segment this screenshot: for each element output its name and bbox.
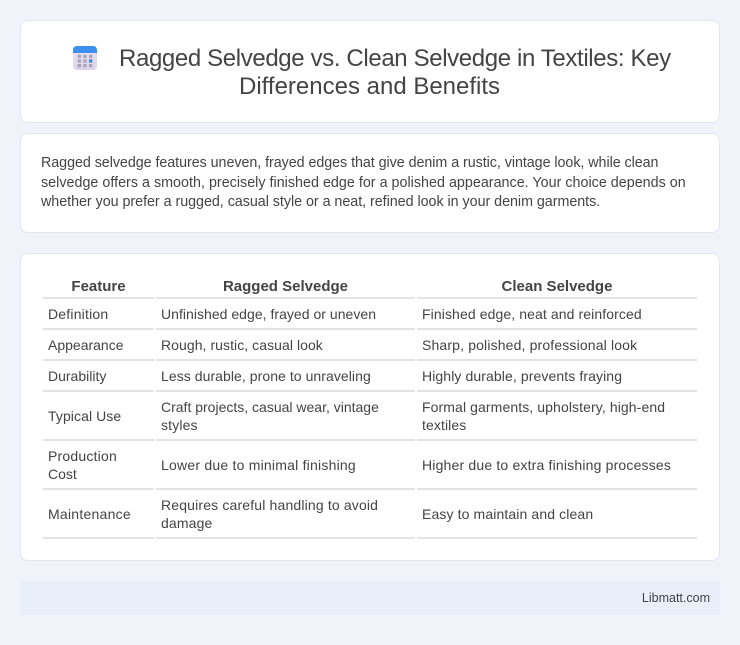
icon: calendar grid	[73, 46, 97, 70]
table header: clean selvedge: Clean Selvedge	[502, 278, 612, 295]
comparison table panel: Finished edge, neat and reinforced	[422, 306, 642, 322]
table header: feature: Feature	[71, 278, 126, 295]
header panel	[20, 20, 720, 123]
comparison table panel: Formal garments, upholstery, high-end	[422, 399, 665, 415]
row: production cost: Production	[48, 448, 117, 464]
comparison table panel: Unfinished edge, frayed or uneven	[161, 306, 376, 322]
comparison table panel: Rough, rustic, casual look	[161, 337, 323, 353]
row: appearance: Appearance	[48, 337, 124, 353]
row: production cost	[48, 448, 117, 482]
comparison table panel: Less durable, prone to unraveling	[161, 368, 371, 384]
title	[119, 45, 671, 100]
comparison table panel: Lower due to minimal finishing	[161, 457, 356, 473]
row: maintenance: Maintenance	[48, 506, 131, 522]
table header: ragged selvedge: Ragged Selvedge	[223, 278, 348, 295]
comparison table panel: Requires careful handling to avoid	[161, 497, 378, 513]
comparison table panel: damage	[161, 515, 212, 531]
comparison table panel: Easy to maintain and clean	[422, 506, 593, 522]
intro paragraph: whether you prefer a rugged, casual style or a neat, refined look in your denim garments.	[41, 194, 600, 210]
comparison table panel: styles	[161, 417, 198, 433]
comparison table panel: Craft projects, casual wear, vintage	[161, 399, 379, 415]
row: production cost: Cost	[48, 466, 77, 482]
comparison table panel: textiles	[422, 417, 466, 433]
footer bar	[20, 581, 720, 615]
intro text panel	[20, 133, 720, 233]
comparison table panel	[20, 253, 720, 561]
comparison table panel: Highly durable, prevents fraying	[422, 368, 622, 384]
row: durability: Durability	[48, 368, 106, 384]
intro paragraph	[41, 155, 686, 210]
title: Differences and Benefits	[239, 73, 500, 100]
footer credit: Libmatt.com	[642, 591, 710, 605]
title: Ragged Selvedge vs. Clean Selvedge in Textiles: Key	[119, 45, 671, 72]
row: definition: Definition	[48, 306, 108, 322]
intro paragraph: Ragged selvedge features uneven, frayed edges that give denim a rustic, vintage look, while clean	[41, 155, 658, 171]
row: typical use: Typical Use	[48, 408, 121, 424]
comparison table panel: Sharp, polished, professional look	[422, 337, 637, 353]
comparison table panel: Higher due to extra finishing processes	[422, 457, 671, 473]
intro paragraph: selvedge offers a smooth, precisely finished edge for a polished appearance. Your choice depends on	[41, 174, 686, 190]
